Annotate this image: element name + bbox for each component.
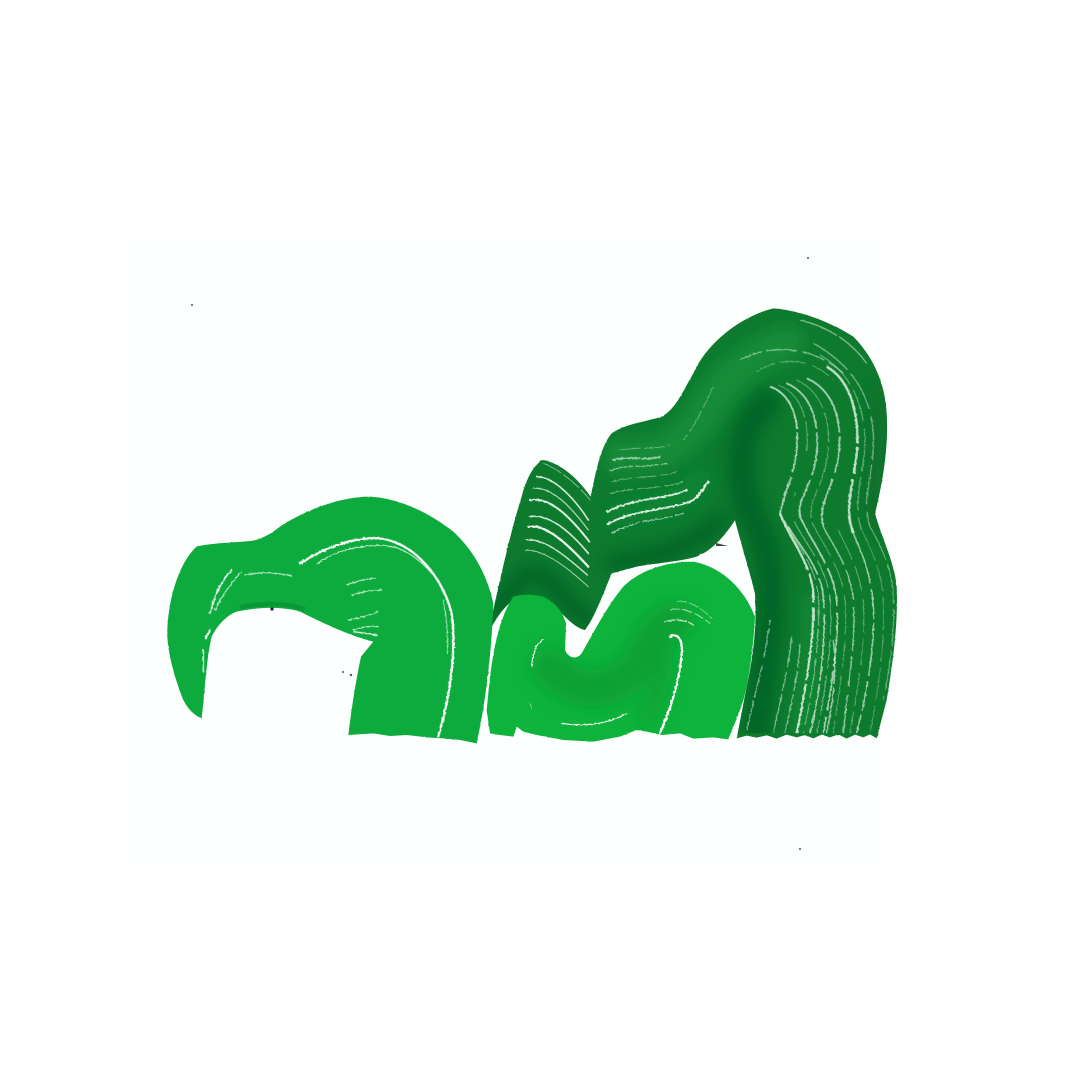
dry-brush streaks, right column (525, 320, 894, 733)
dry-brush streaks, left crest (525, 463, 590, 587)
white streaks, left stroke (203, 538, 453, 737)
underside shadow (240, 604, 305, 609)
artwork: left brush stroke, bright green (167, 497, 493, 743)
paper sheet (125, 238, 890, 870)
white streaks, middle stroke (530, 601, 712, 733)
ink specks (191, 257, 809, 850)
artwork: middle brush stroke, bright green (487, 562, 755, 742)
dry-brush streaks, middle wave (607, 445, 708, 533)
artwork: right brush stroke, dark green (488, 308, 897, 739)
